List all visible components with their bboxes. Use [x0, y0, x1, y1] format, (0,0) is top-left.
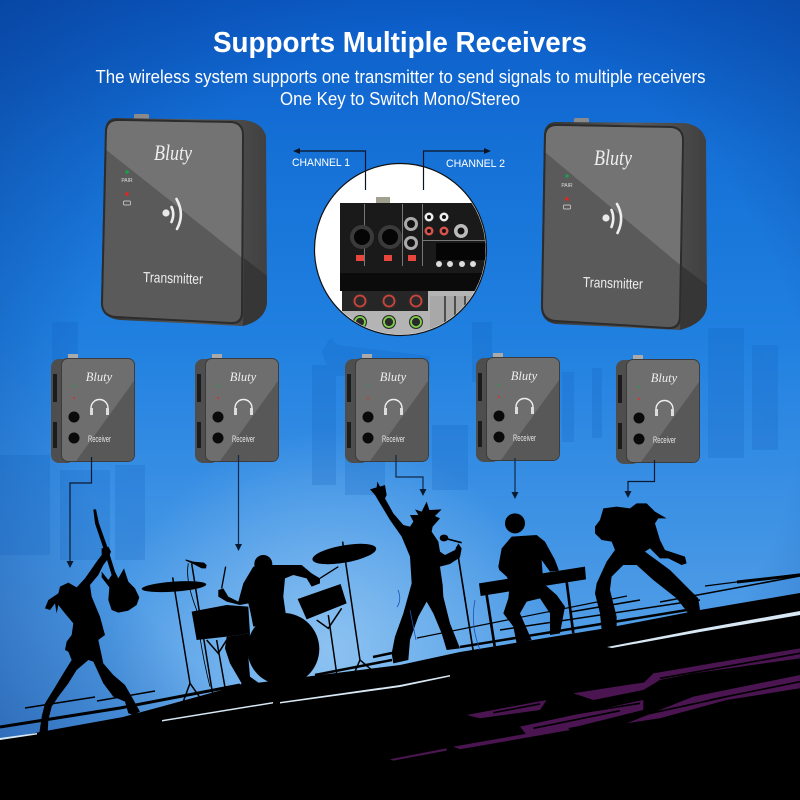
transmitter left: PAIR	[121, 178, 133, 184]
silhouette: bassist	[595, 503, 700, 630]
transmitter left	[100, 114, 267, 328]
receiver 1: Bluty	[86, 370, 113, 384]
transmitter right: Transmitter	[583, 275, 643, 293]
background: faint city skyline	[0, 322, 778, 560]
receiver 2: Receiver	[232, 434, 255, 445]
arrow: channel 1	[293, 148, 366, 190]
arrow: receiver 5 to bassist	[624, 460, 654, 498]
arrow: receiver 2 to drummer	[235, 455, 242, 551]
label: channel 1: CHANNEL 1	[292, 157, 350, 169]
receiver 5: Receiver	[653, 435, 676, 446]
receiver 5: Bluty	[651, 371, 678, 385]
silhouette: singer	[370, 482, 473, 663]
receiver 2	[195, 354, 279, 463]
receiver 4	[476, 353, 560, 462]
receiver 1	[51, 354, 135, 463]
receiver 1: Receiver	[88, 434, 111, 445]
silhouette: guitarist	[39, 509, 140, 733]
receiver 4: Bluty	[511, 369, 538, 383]
arrow: receiver 4 to keyboardist	[512, 458, 518, 499]
arrow: receiver 3 to singer	[396, 455, 426, 496]
stage brush strokes	[0, 574, 800, 727]
receiver 2: Bluty	[230, 370, 257, 384]
receiver 4: Receiver	[513, 433, 536, 444]
transmitter right	[540, 118, 707, 332]
title: Supports Multiple Receivers	[213, 27, 587, 59]
receiver 3	[345, 354, 429, 463]
stage ground	[0, 593, 800, 800]
subtitle line 2: One Key to Switch Mono/Stereo	[280, 88, 520, 109]
transmitter left: Transmitter	[143, 270, 203, 288]
purple streaks on the ground	[390, 648, 800, 761]
mixer circle	[314, 164, 496, 341]
silhouette: drummer and drum kit	[141, 540, 378, 703]
receiver 3: Bluty	[380, 370, 407, 384]
label: channel 2: CHANNEL 2	[446, 158, 505, 170]
subtitle line 1: The wireless system supports one transmitter to send signals to multiple receivers	[96, 66, 706, 87]
arrow: receiver 1 to guitarist	[66, 457, 92, 568]
receiver 5	[616, 355, 700, 464]
singer scribble decoration	[397, 590, 480, 650]
transmitter right: Bluty	[594, 145, 632, 170]
arrow: channel 2	[424, 148, 491, 190]
transmitter left: Bluty	[154, 140, 192, 165]
transmitter right: PAIR	[561, 183, 573, 189]
silhouette: keyboardist	[479, 513, 586, 648]
receiver 3: Receiver	[382, 434, 405, 445]
